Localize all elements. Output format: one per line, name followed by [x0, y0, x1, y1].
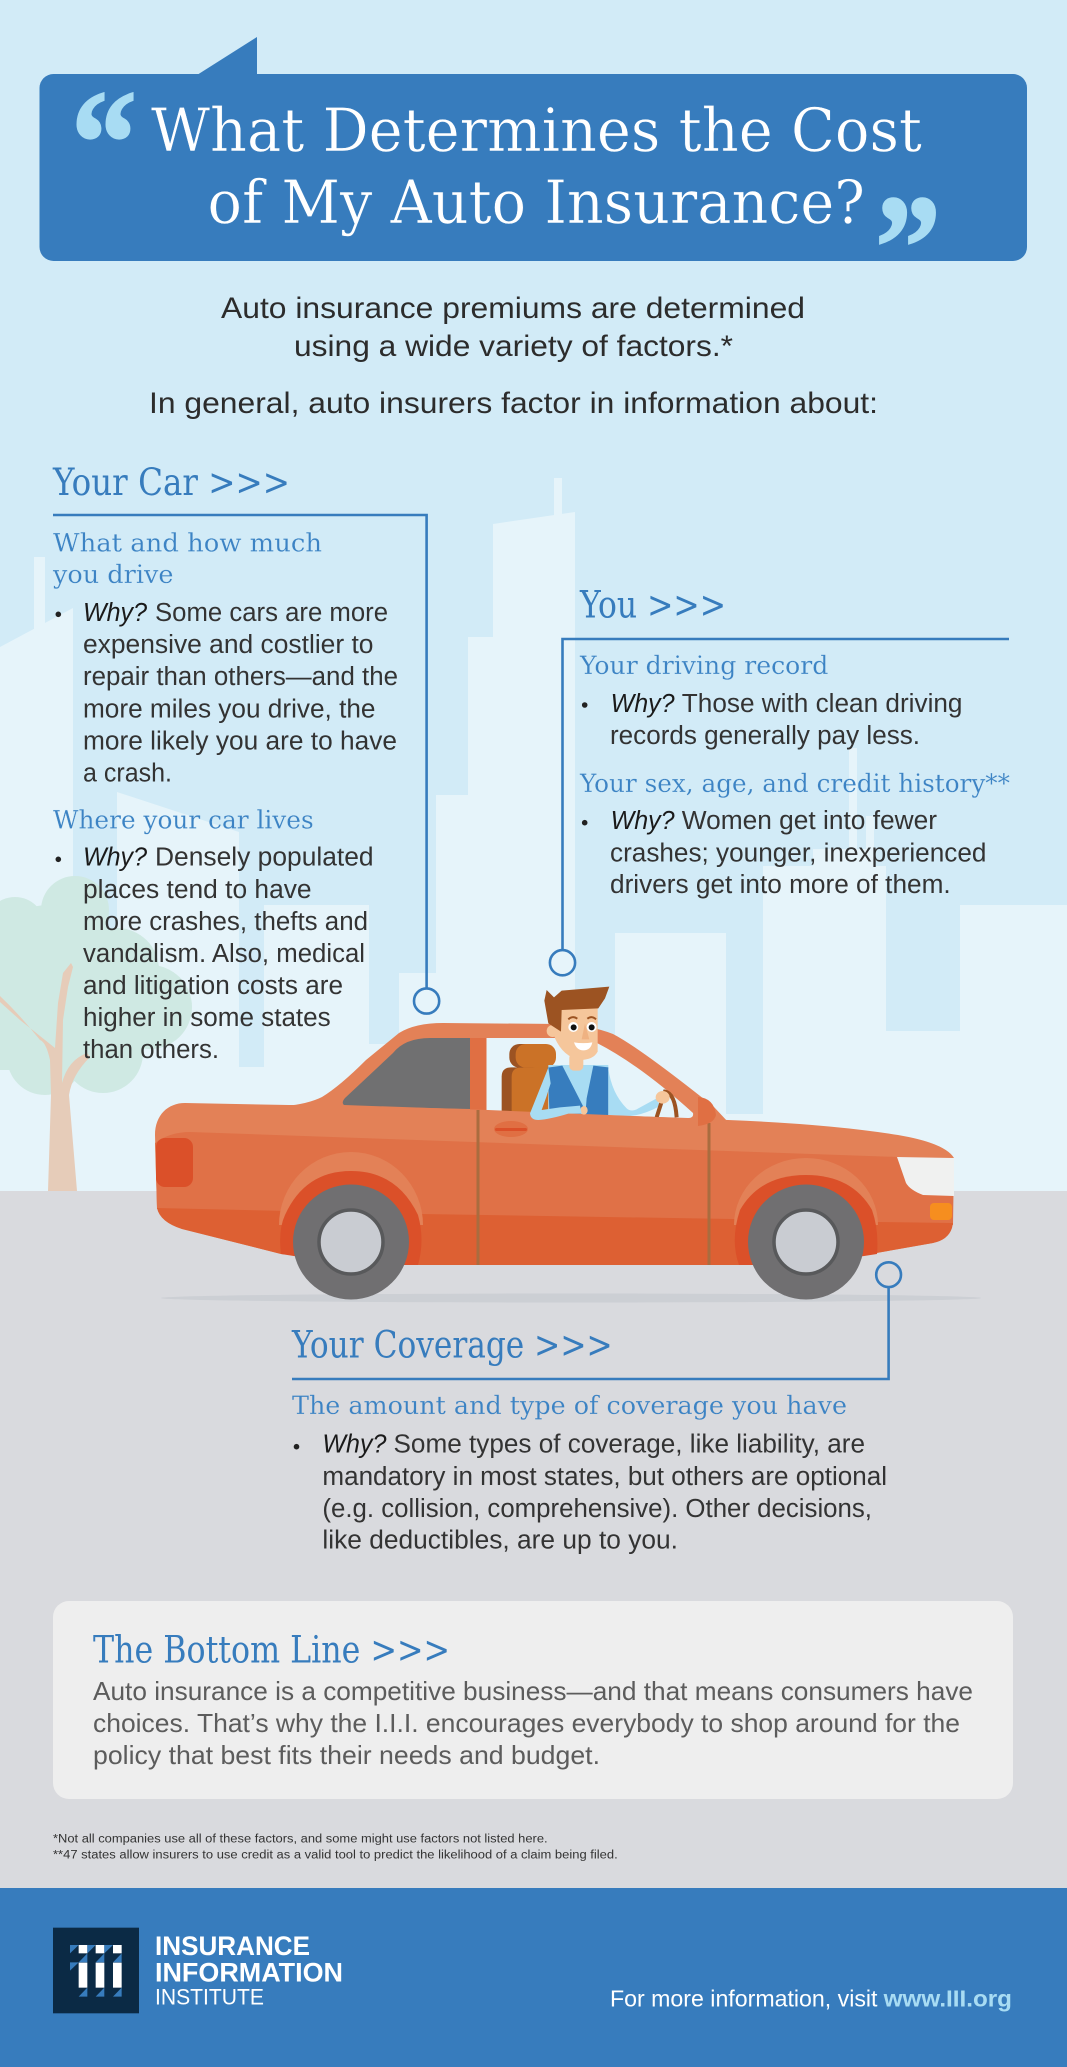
website callout: [610, 1986, 1012, 2012]
heading: your car: Your Car >>>: [52, 461, 290, 504]
bullet: location: [56, 844, 374, 1064]
side mirror: [698, 1097, 716, 1126]
footer band: [0, 1888, 1067, 2067]
logo wordmark: INFORMATION: [155, 1958, 343, 1988]
bullet: mileage: a crash.: [83, 759, 172, 787]
bullet: mileage: expensive and costlier to: [83, 631, 374, 659]
logo mark: [53, 1928, 139, 2013]
logo wordmark: [155, 1931, 343, 2010]
footnotes: *Not all companies use all of these factors, and some might use factors not listed here.: [53, 1834, 548, 1846]
car roof and pillars: [285, 1023, 728, 1125]
website callout: www.III.org: [883, 1986, 1012, 2012]
bullet: location: than others.: [83, 1036, 219, 1064]
body text: [93, 1676, 973, 1770]
panel: the bottom line: [53, 1601, 1013, 1799]
driver: [502, 987, 677, 1117]
connector line to car: [53, 515, 439, 1014]
bullet: driving record: [582, 690, 962, 750]
bullet: coverage: [294, 1431, 887, 1555]
bullet: location: Why?: [83, 844, 148, 872]
bullet: coverage: (e.g. collision, comprehensive). Other decisions,: [322, 1495, 872, 1523]
heading: your coverage: Your Coverage >>>: [291, 1324, 613, 1367]
bullet: driving record: records generally pay less.: [610, 722, 920, 750]
logo wordmark: INSTITUTE: [155, 1985, 264, 2010]
bullet: location: higher in some states: [83, 1004, 331, 1032]
website callout: For more information, visit: [610, 1986, 878, 2012]
intro text: using a wide variety of factors.*: [294, 330, 733, 363]
closing quote mark: ”: [875, 165, 941, 331]
bullet: coverage: mandatory in most states, but others are optional: [322, 1463, 887, 1491]
subheading: amount and type of coverage: The amount and type of coverage you have: [292, 1391, 847, 1420]
bullet: mileage: [56, 599, 398, 787]
subheading: what and how much you drive: What and how much: [53, 529, 322, 558]
panel background: [53, 1601, 1013, 1799]
subheading: where your car lives: Where your car lives: [53, 806, 314, 835]
panel: your coverage: [291, 1262, 901, 1555]
bullet: mileage: Why?: [83, 599, 148, 627]
bullet: demographics: Women get into fewer: [682, 807, 938, 835]
bullet: coverage: Why?: [322, 1431, 387, 1459]
bullet: location: Densely populated: [155, 844, 374, 872]
title text: What Determines the Cost: [151, 96, 922, 166]
car shadow: [161, 1294, 981, 1302]
bullet: coverage: like deductibles, are up to you.: [322, 1527, 678, 1555]
front wheel: [748, 1184, 864, 1300]
subheading: your sex, age, and credit history: Your sex, age, and credit history**: [579, 769, 1010, 798]
front side window: [486, 1038, 693, 1118]
car body: [155, 1103, 954, 1265]
body text: Auto insurance is a competitive business—and that means consumers have: [93, 1676, 973, 1706]
panel: you: [550, 583, 1010, 975]
bullet: demographics: crashes; younger, inexperienced: [610, 839, 986, 867]
background: sky: [0, 0, 1067, 1191]
bullet: mileage: more likely you are to have: [83, 727, 397, 755]
bullet: coverage: Some types of coverage, like liability, are: [394, 1431, 865, 1459]
footnotes: **47 states allow insurers to use credit as a valid tool to predict the likelihood of a claim being filed.: [53, 1850, 618, 1862]
bullet: location: more crashes, thefts and: [83, 908, 368, 936]
bullet: driving record: Why?: [611, 690, 675, 718]
bullet: mileage: more miles you drive, the: [83, 695, 376, 723]
connector line to wheel: [292, 1262, 901, 1379]
opening quote mark: “: [71, 60, 137, 226]
connector line to driver: [550, 639, 1009, 975]
background: road: [0, 1191, 1067, 1888]
rear side window: [343, 1038, 470, 1109]
rear wheel: [293, 1184, 409, 1300]
bullet: location: and litigation costs are: [83, 972, 343, 1000]
door pillar: [470, 1038, 486, 1110]
bullet: driving record: Those with clean driving: [682, 690, 962, 718]
intro text: Auto insurance premiums are determined: [221, 292, 805, 325]
driver's forearm: [530, 1068, 588, 1120]
subheading: your driving record: Your driving record: [579, 651, 828, 680]
logo wordmark: INSURANCE: [155, 1931, 310, 1961]
title banner: [40, 37, 1027, 331]
speech bubble: [40, 37, 1027, 261]
subheading: what and how much you drive: you drive: [52, 560, 173, 589]
illustration: tree: [0, 876, 192, 1191]
footnotes: [53, 1834, 618, 1862]
bullet: mileage: Some cars are more: [155, 599, 388, 627]
bullet: location: places tend to have: [83, 876, 312, 904]
illustration: car with driver: [155, 987, 981, 1302]
panel: your car: [52, 461, 439, 1064]
title text: [151, 96, 922, 238]
bullet: demographics: [582, 807, 986, 899]
bullet: demographics: Why?: [611, 807, 675, 835]
intro text: [149, 292, 878, 420]
title text: of My Auto Insurance?: [208, 168, 865, 238]
body text: choices. That’s why the I.I.I. encourages everybody to shop around for the: [93, 1708, 960, 1738]
body text: policy that best fits their needs and budget.: [93, 1740, 600, 1770]
bullet: mileage: repair than others—and the: [83, 663, 398, 691]
subheading: what and how much you drive: [52, 529, 322, 589]
heading: the bottom line: The Bottom Line >>>: [93, 1629, 450, 1672]
bullet: location: vandalism. Also, medical: [83, 940, 365, 968]
intro text: In general, auto insurers factor in information about:: [149, 387, 878, 420]
background: city skyline: [0, 478, 1067, 1191]
heading: you: You >>>: [579, 583, 726, 626]
bullet: demographics: drivers get into more of them.: [610, 871, 951, 899]
